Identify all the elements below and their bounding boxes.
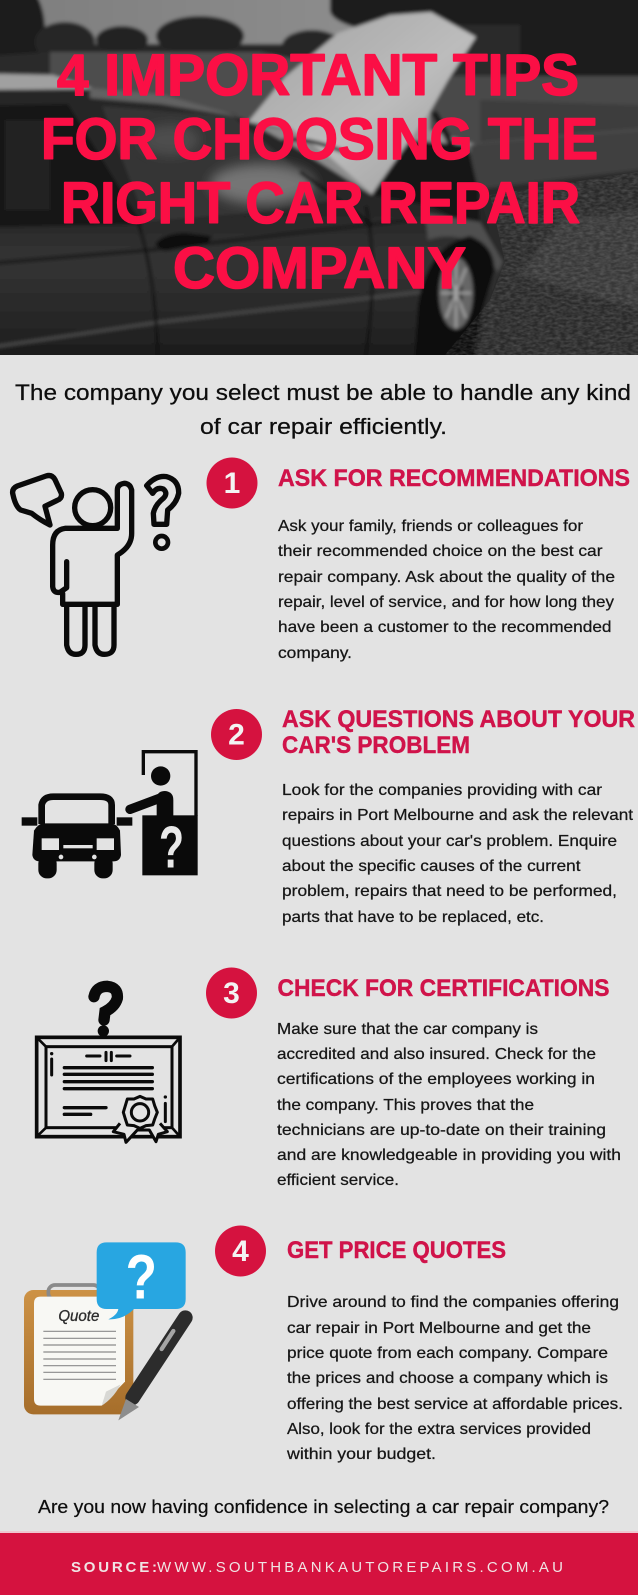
step 2 text: about the specific causes of the current bbox=[282, 858, 581, 875]
title: 4 IMPORTANT TIPS bbox=[57, 43, 579, 108]
step 4 text: Drive around to find the companies offering bbox=[287, 1294, 619, 1311]
title bbox=[41, 43, 598, 301]
icon: car at service booth: ? bbox=[159, 813, 184, 880]
intro text: The company you select must be able to handle any kind bbox=[15, 380, 631, 405]
intro text bbox=[15, 380, 631, 439]
icon: quote clipboard with question bubble and pen: Quote bbox=[58, 1308, 99, 1325]
icon: car at service booth bbox=[22, 752, 198, 880]
closing question: Are you now having confidence in selecting a car repair company? bbox=[38, 1497, 609, 1517]
step 2 text bbox=[282, 782, 634, 926]
step 3 text: certifications of the employees working in bbox=[277, 1071, 595, 1088]
step 1 number badge: 1 bbox=[224, 467, 240, 500]
footer band bbox=[0, 1531, 638, 1595]
step 3 text: efficient service. bbox=[277, 1172, 399, 1189]
step 4 heading: GET PRICE QUOTES bbox=[287, 1237, 506, 1264]
step 1 text: Ask your family, friends or colleagues for bbox=[278, 518, 584, 535]
step 4 text: within your budget. bbox=[286, 1446, 436, 1463]
step 2 text: Look for the companies providing with car bbox=[282, 782, 603, 799]
step 2 number badge: 2 bbox=[228, 718, 245, 752]
step 1 text: have been a customer to the recommended bbox=[278, 619, 612, 636]
icon: person raising hand with speech bubble and question mark bbox=[13, 475, 179, 654]
source line: SOURCE: bbox=[71, 1559, 157, 1576]
step 1 text: their recommended choice on the best car bbox=[278, 543, 603, 560]
title: FOR CHOOSING THE bbox=[41, 107, 598, 172]
step 4 text: car repair in Port Melbourne and get the bbox=[287, 1320, 591, 1337]
step 1 text: repair company. Ask about the quality of the bbox=[278, 569, 615, 586]
step 1 text: repair, level of service, and for how long they bbox=[278, 594, 614, 611]
step 2 text: problem, repairs that need to be performed, bbox=[282, 883, 617, 900]
step 3 text: technicians are up-to-date on their training bbox=[277, 1122, 606, 1139]
step 1 text bbox=[278, 518, 615, 662]
hero photo: car with open hood bbox=[0, 0, 638, 355]
step 3 text bbox=[277, 1021, 621, 1189]
step 3 number badge: 3 bbox=[223, 977, 240, 1010]
step 2 heading: CAR'S PROBLEM bbox=[282, 732, 470, 759]
step 3 text: and are knowledgeable in providing you with bbox=[277, 1147, 621, 1164]
step 3 heading: CHECK FOR CERTIFICATIONS bbox=[278, 975, 610, 1002]
step 4 number badge bbox=[215, 1226, 266, 1276]
title: COMPANY bbox=[173, 236, 466, 301]
icon: quote clipboard with question bubble and pen: ? bbox=[126, 1242, 157, 1312]
step 1 number badge bbox=[206, 458, 258, 508]
step 3 text: Make sure that the car company is bbox=[277, 1021, 538, 1038]
step 3 text: the company. This proves that the bbox=[277, 1097, 534, 1114]
source line: WWW.SOUTHBANKAUTOREPAIRS.COM.AU bbox=[157, 1559, 563, 1576]
intro text: of car repair efficiently. bbox=[200, 414, 447, 439]
step 4 text: offering the best service at affordable prices. bbox=[287, 1396, 623, 1413]
step 3 number badge bbox=[206, 968, 257, 1018]
step 2 heading bbox=[282, 706, 635, 759]
step 2 text: repairs in Port Melbourne and ask the relevant bbox=[282, 807, 634, 824]
icon: certificate with question mark bbox=[37, 986, 180, 1142]
step 4 text: price quote from each company. Compare bbox=[287, 1345, 608, 1362]
step 1 text: company. bbox=[278, 645, 352, 662]
step 4 text: Also, look for the extra services provided bbox=[287, 1421, 591, 1438]
icon: quote clipboard with question bubble and pen bbox=[24, 1242, 186, 1420]
step 3 text: accredited and also insured. Check for the bbox=[277, 1046, 596, 1063]
step 2 text: parts that have to be replaced, etc. bbox=[282, 909, 544, 926]
step 4 text bbox=[286, 1294, 623, 1463]
step 1 heading: ASK FOR RECOMMENDATIONS bbox=[278, 465, 630, 492]
step 2 number badge bbox=[211, 709, 262, 760]
step 4 text: the prices and choose a company which is bbox=[287, 1370, 608, 1387]
step 4 number badge: 4 bbox=[232, 1235, 249, 1268]
step 2 text: questions about your car's problem. Enquire bbox=[282, 833, 617, 850]
title: RIGHT CAR REPAIR bbox=[61, 171, 580, 236]
